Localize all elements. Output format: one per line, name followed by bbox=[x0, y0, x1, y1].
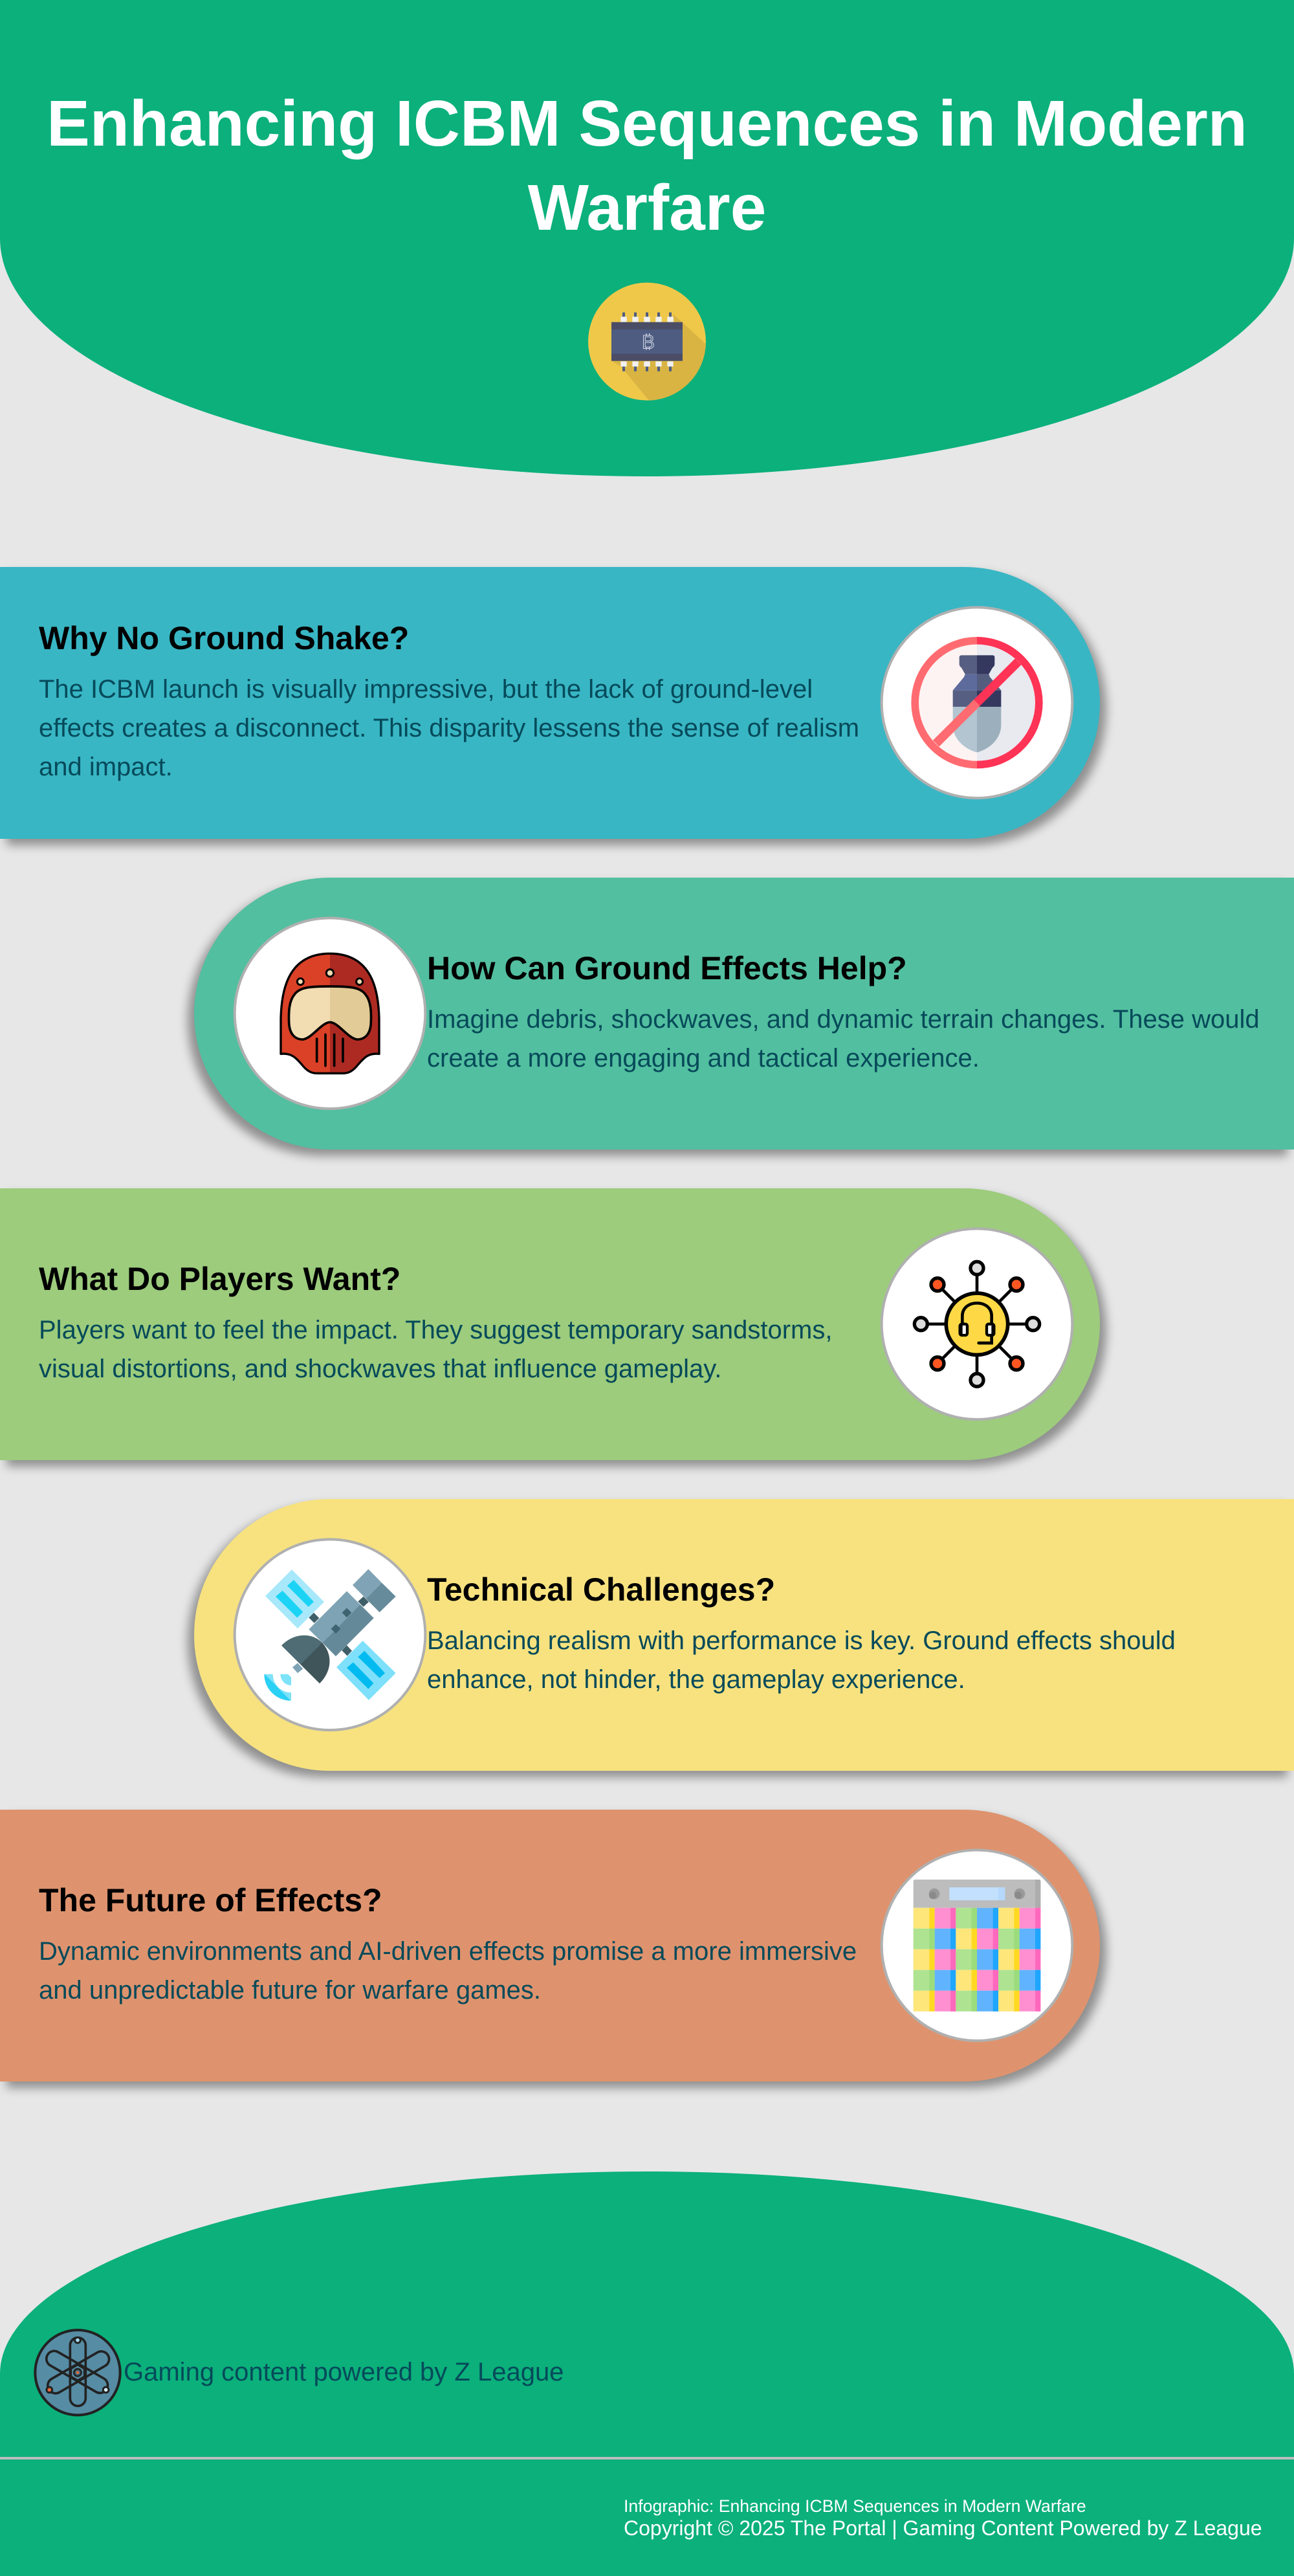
heading: Why No Ground Shake? bbox=[39, 620, 409, 656]
heading: What Do Players Want? bbox=[39, 1261, 400, 1297]
text block bbox=[39, 1316, 832, 1383]
panel: technical challenges bbox=[194, 1499, 1294, 1771]
text block: and unpredictable future for warfare games. bbox=[39, 1976, 541, 2004]
icon: bitcoin chip bbox=[588, 282, 706, 401]
icon: bitcoin chip: B bbox=[642, 331, 655, 353]
title: Enhancing ICBM Sequences in Modern bbox=[47, 87, 1247, 160]
heading: The Future of Effects? bbox=[39, 1882, 382, 1918]
icon: atom badge bbox=[34, 2329, 122, 2417]
icon: headset network bbox=[880, 1227, 1074, 1421]
text block bbox=[427, 1627, 1176, 1694]
text block bbox=[39, 1937, 857, 2004]
text block: The ICBM launch is visually impressive, but the lack of ground-level bbox=[39, 675, 813, 704]
text block: Dynamic environments and AI-driven effects promise a more immersive bbox=[39, 1937, 857, 1966]
text block: create a more engaging and tactical experience. bbox=[427, 1044, 980, 1072]
copyright line: Copyright © 2025 The Portal | Gaming Content Powered by Z League bbox=[624, 2516, 1262, 2540]
text block bbox=[39, 675, 859, 781]
panel: why no ground shake bbox=[0, 567, 1100, 839]
title bbox=[47, 87, 1247, 244]
icon: satellite bbox=[233, 1538, 427, 1731]
heading: How Can Ground Effects Help? bbox=[427, 950, 907, 986]
title: Warfare bbox=[528, 172, 766, 244]
text block: effects creates a disconnect. This disparity lessens the sense of realism bbox=[39, 714, 859, 742]
text block: and impact. bbox=[39, 753, 173, 781]
text block: Imagine debris, shockwaves, and dynamic terrain changes. These would bbox=[427, 1005, 1260, 1034]
powered by text: Gaming content powered by Z League bbox=[124, 2358, 564, 2386]
footer caption: Infographic: Enhancing ICBM Sequences in Modern Warfare bbox=[624, 2496, 1086, 2516]
text block: visual distortions, and shockwaves that influence gameplay. bbox=[39, 1355, 721, 1383]
text block: Balancing realism with performance is key. Ground effects should bbox=[427, 1627, 1176, 1655]
panel: what do players want bbox=[0, 1188, 1100, 1460]
icon: colour grid panel bbox=[880, 1849, 1074, 2042]
header banner bbox=[0, 0, 1294, 476]
icon: helmet bbox=[233, 916, 427, 1110]
divider line bbox=[0, 2457, 1294, 2459]
panel: the future of effects bbox=[0, 1810, 1100, 2082]
text block: enhance, not hinder, the gameplay experience. bbox=[427, 1665, 965, 1694]
panel: how can ground effects help bbox=[194, 878, 1294, 1149]
text block: Players want to feel the impact. They suggest temporary sandstorms, bbox=[39, 1316, 832, 1344]
heading: Technical Challenges? bbox=[427, 1571, 775, 1608]
text block bbox=[427, 1005, 1260, 1072]
icon: crossed-out bomb bbox=[880, 606, 1074, 799]
footer banner bbox=[0, 2171, 1294, 2576]
